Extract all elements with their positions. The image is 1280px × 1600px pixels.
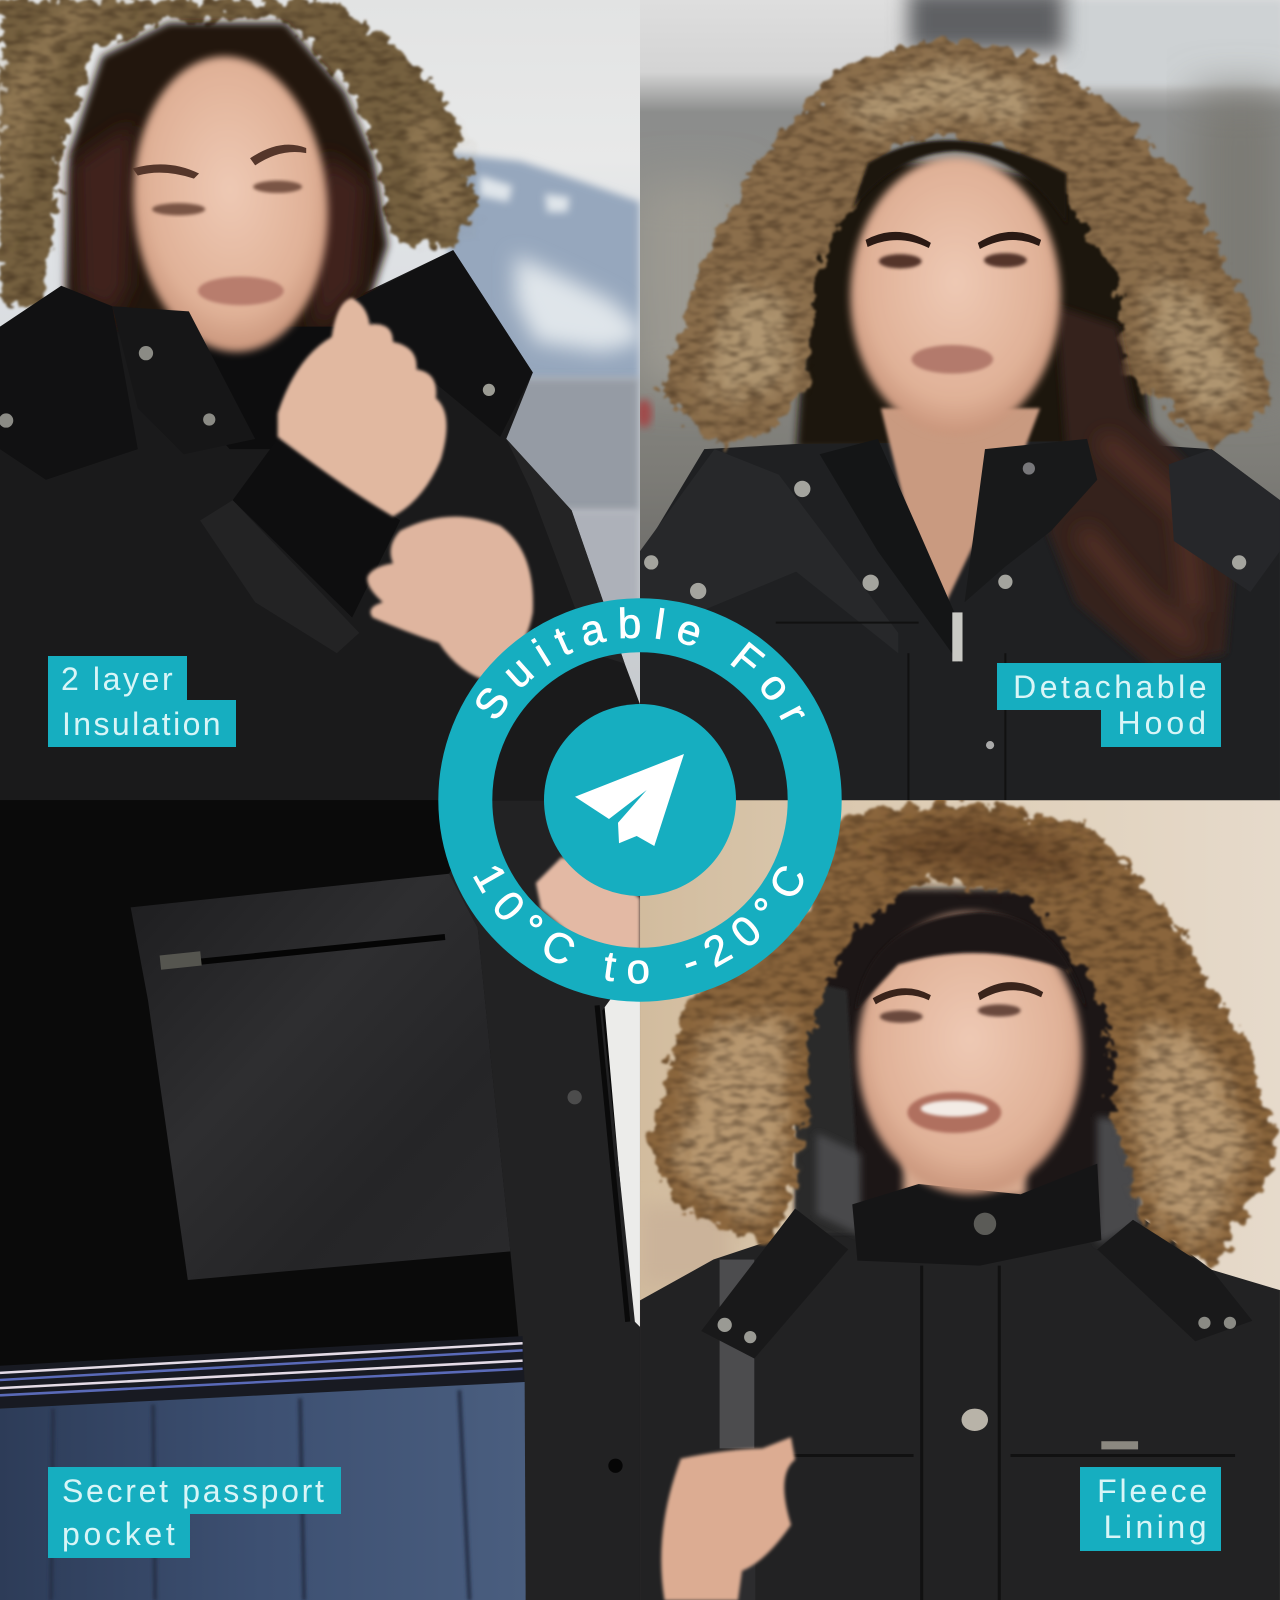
label: Secret passport pocket: pocket	[62, 1516, 178, 1552]
photo: smiling woman with fleece-lined hood	[640, 800, 1280, 1600]
label: Detachable Hood: Hood	[1118, 705, 1210, 741]
hood fur	[0, 0, 478, 311]
label: Fleece Lining	[1080, 1467, 1221, 1551]
photo: jacket interior with passport pocket	[0, 800, 641, 1600]
label: Fleece Lining: Lining	[1104, 1509, 1210, 1545]
label: 2 layer Insulation: 2 layer	[61, 661, 175, 697]
ring text: Suitable For: Suitable For	[476, 607, 805, 720]
label: Detachable Hood: Detachable	[1013, 669, 1210, 705]
photo: woman with detachable fur hood on city street	[636, 0, 1280, 800]
badge: suitable temperature range	[438, 598, 842, 1002]
label: Secret passport pocket: Secret passport	[62, 1473, 327, 1509]
pocket	[131, 874, 510, 1280]
hood fur	[648, 800, 1277, 1270]
label: Fleece Lining: Fleece	[1097, 1473, 1210, 1509]
photo: woman with fur hood adjusting cuff	[0, 0, 641, 800]
label: 2 layer Insulation	[48, 656, 236, 747]
hood fur	[660, 36, 1273, 449]
ring text: temperature range: 10°C to -20°C	[473, 866, 804, 984]
label: Detachable Hood	[997, 663, 1221, 747]
label: Secret passport pocket	[48, 1467, 341, 1558]
icon: paper plane	[575, 754, 684, 846]
label: 2 layer Insulation: Insulation	[62, 706, 223, 742]
lining	[0, 1382, 526, 1600]
